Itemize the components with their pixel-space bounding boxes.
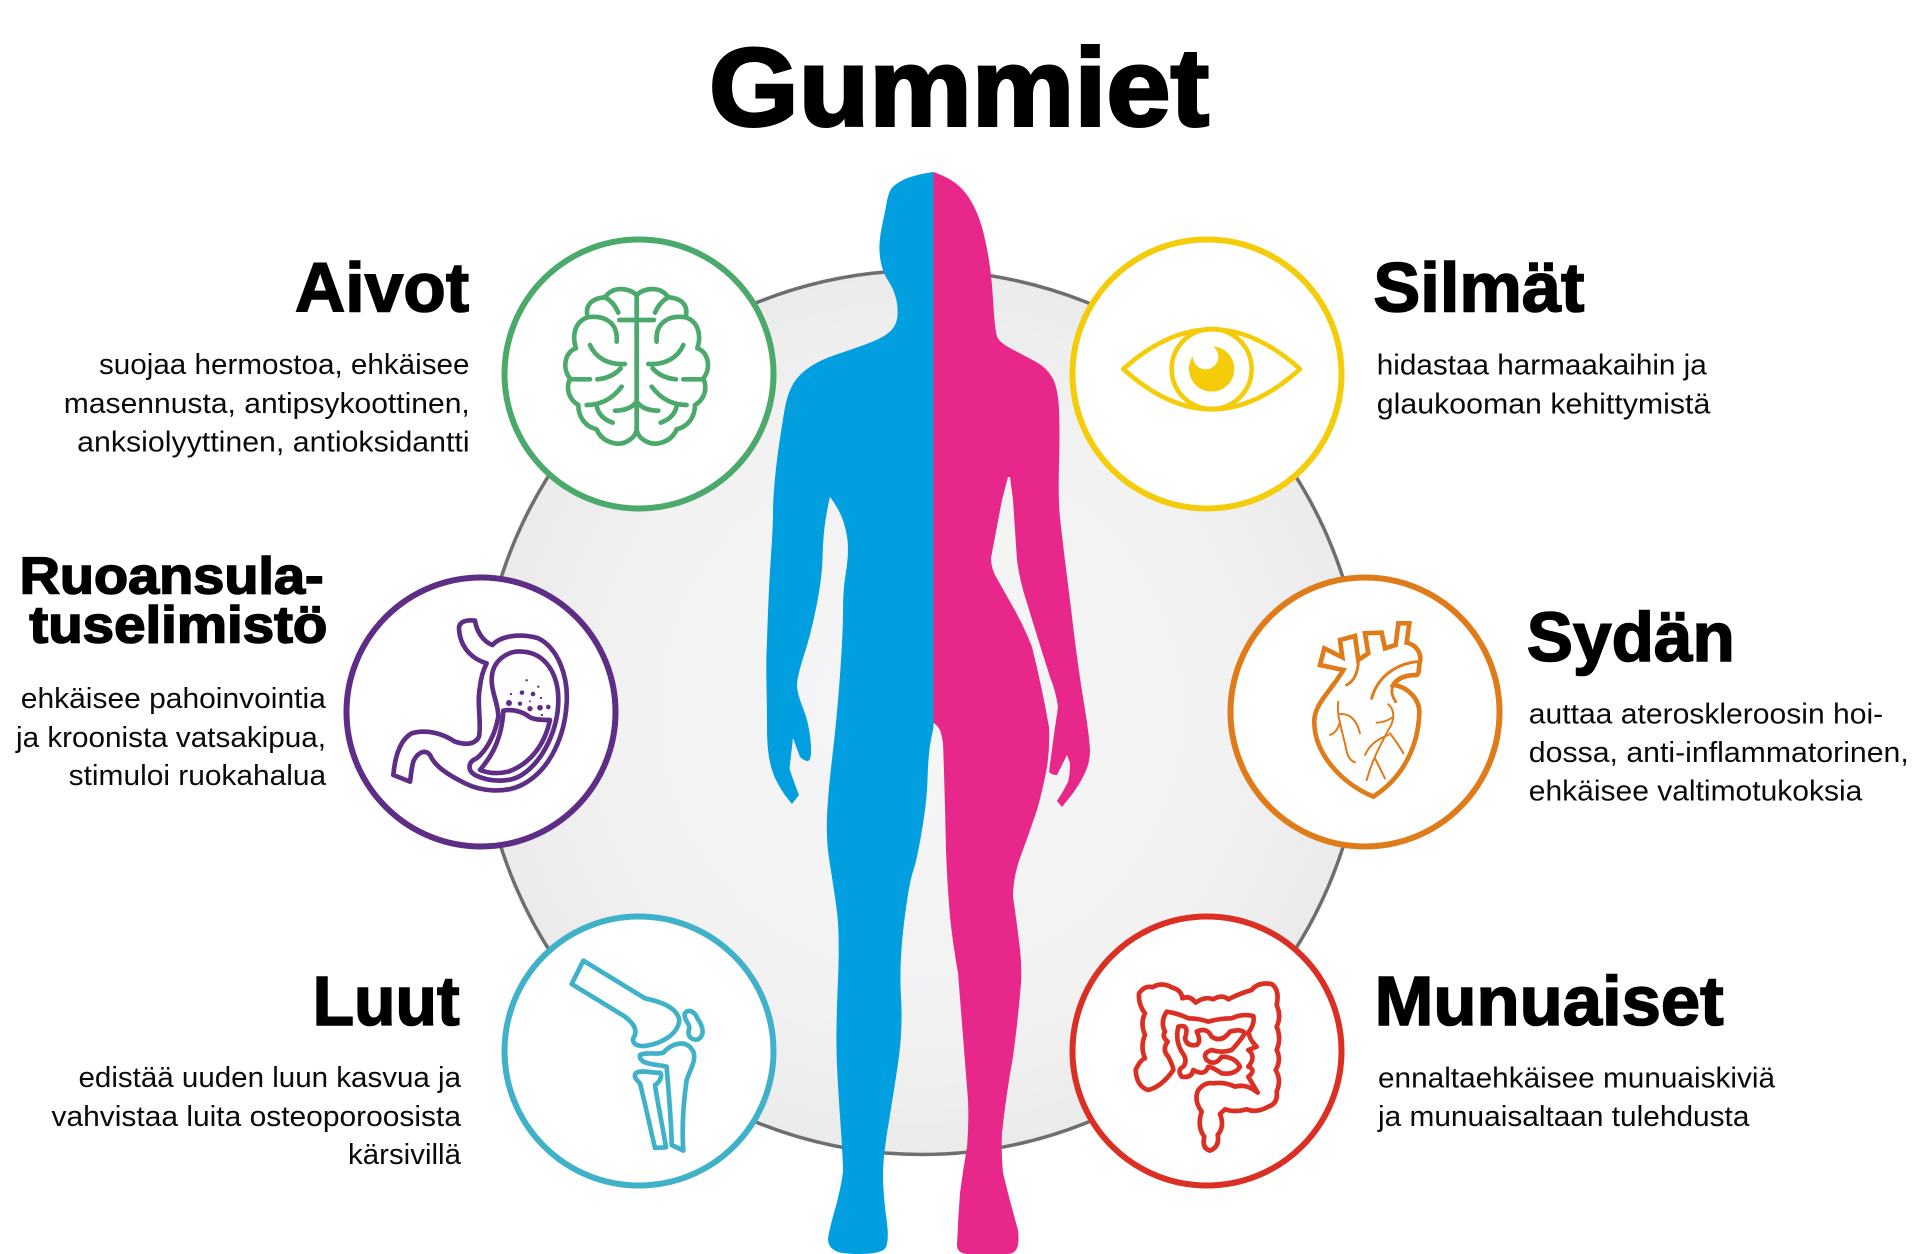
- panel: Munuaiset icon: [1072, 916, 1342, 1186]
- icon: brain: [565, 289, 708, 444]
- text: Munuaiset description: [1377, 1062, 1776, 1133]
- panel: Sydän icon: [1230, 578, 1500, 846]
- text: Ruoansulatuselimistö description: stimuloi ruokahalua: [69, 760, 327, 792]
- panel: Luut icon: [504, 916, 774, 1186]
- panel: Ruoansulatuselimistö icon: [346, 578, 616, 846]
- text: Aivot description: masennusta, antipsykoottinen,: [64, 388, 470, 420]
- icon: eye: [1123, 329, 1300, 409]
- heading: Silmät: Silmät: [1373, 248, 1584, 326]
- title: Gummiet: [709, 26, 1209, 150]
- background circle: [480, 270, 1364, 1154]
- text: Munuaiset description: ja munuaisaltaan tulehdusta: [1377, 1101, 1750, 1133]
- text: Sydän description: auttaa ateroskleroosin hoi-: [1529, 698, 1883, 730]
- text: Silmät description: glaukooman kehittymistä: [1377, 388, 1711, 420]
- heading: Aivot: Aivot: [295, 248, 469, 326]
- text: Ruoansulatuselimistö description: ehkäisee pahoinvointia: [21, 683, 327, 715]
- icon: heart: [1314, 623, 1420, 797]
- icon: intestines: [1136, 983, 1279, 1151]
- text: Aivot description: anksiolyyttinen, antioksidantti: [77, 426, 470, 458]
- heading: Munuaiset: Munuaiset: [1375, 962, 1724, 1040]
- text: Ruoansulatuselimistö description: [15, 683, 327, 792]
- text: Aivot description: [64, 349, 470, 458]
- heading: Luut: Luut: [313, 962, 460, 1040]
- heading: Ruoansulatuselimistö: Ruoansula-: [20, 548, 324, 606]
- panel: Silmät icon: [1072, 240, 1342, 508]
- heading: Ruoansulatuselimistö: tuselimistö: [29, 596, 327, 654]
- text: Luut description: vahvistaa luita osteoporoosista: [52, 1101, 462, 1133]
- male half: [766, 172, 934, 1254]
- icon: stomach: [393, 620, 567, 790]
- text: Ruoansulatuselimistö description: ja kroonista vatsakipua,: [15, 722, 326, 754]
- text: Munuaiset description: ennaltaehkäisee munuaiskiviä: [1378, 1062, 1776, 1094]
- female half: [934, 172, 1090, 1254]
- text: Sydän description: [1529, 698, 1909, 808]
- text: Silmät description: [1377, 350, 1711, 420]
- icon: knee joint: [572, 961, 703, 1151]
- text: Aivot description: suojaa hermostoa, ehkäisee: [99, 349, 470, 381]
- body silhouette: [766, 172, 1090, 1254]
- text: Luut description: kärsivillä: [348, 1139, 462, 1171]
- text: Luut description: edistää uuden luun kasvua ja: [78, 1062, 462, 1094]
- text: Silmät description: hidastaa harmaakaihin ja: [1377, 350, 1708, 382]
- text: Sydän description: ehkäisee valtimotukoksia: [1529, 776, 1863, 808]
- text: Luut description: [52, 1062, 462, 1171]
- heading: Ruoansulatuselimistö: [20, 548, 327, 654]
- text: Sydän description: dossa, anti-inflammatorinen,: [1529, 737, 1909, 769]
- heading: Sydän: Sydän: [1527, 598, 1735, 676]
- panel: Aivot icon: [504, 240, 774, 508]
